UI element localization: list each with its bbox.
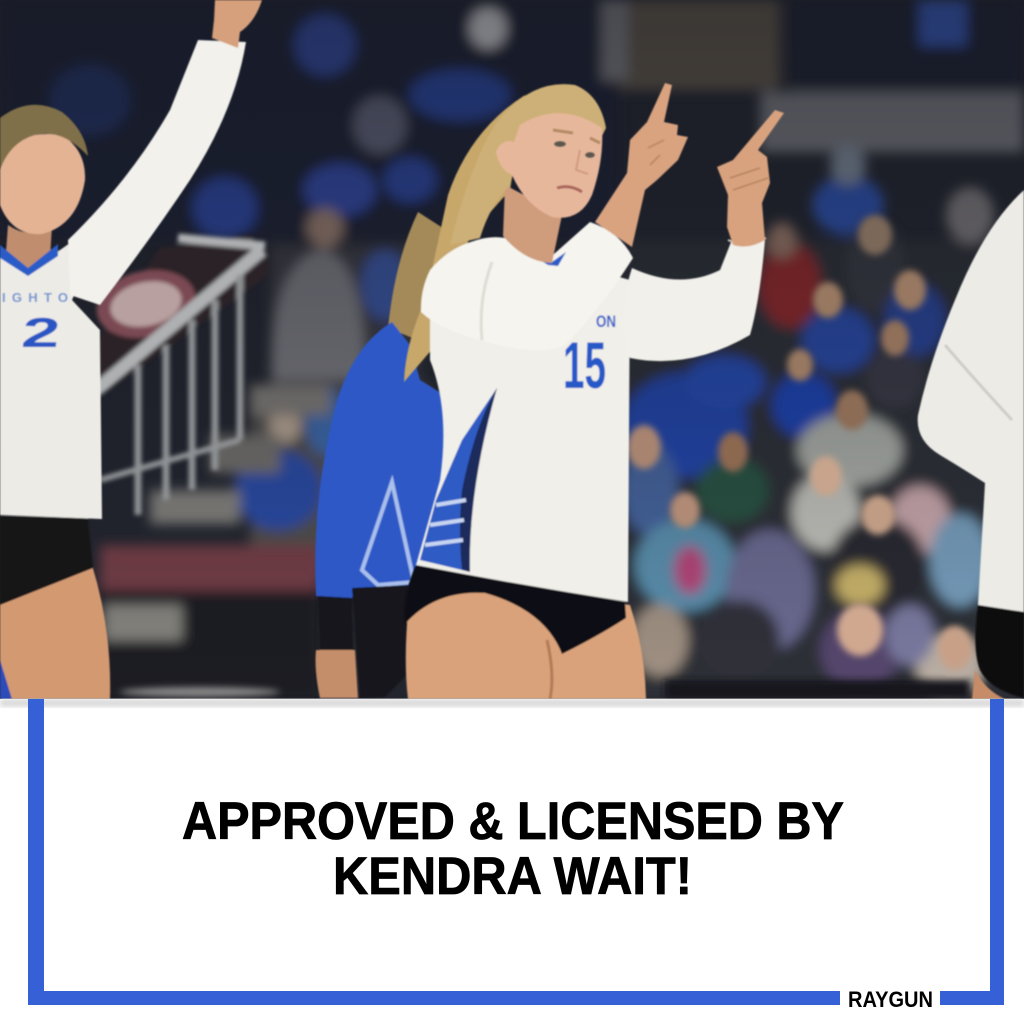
near forearm and hand [595, 83, 688, 247]
face [496, 113, 602, 218]
player number 2 at left: 2 [20, 309, 63, 356]
shorts [404, 565, 626, 654]
player number 2 at left: IGHTO [2, 290, 68, 305]
brand wordmark: RAYGUN [848, 987, 933, 1012]
photo: volleyball players in front of crowd [0, 0, 1024, 700]
jersey number and wordmark: 15 [563, 328, 606, 402]
player number 2 at left [0, 0, 262, 699]
hair back [450, 84, 606, 245]
neck [503, 185, 562, 263]
near arm sleeve [420, 221, 634, 320]
title: APPROVED & LICENSED BY [182, 792, 844, 851]
blurred crowd background [0, 0, 1024, 700]
blue frame [28, 699, 1004, 1005]
far arm sleeve [623, 232, 765, 361]
far forearm and hand [717, 110, 784, 247]
title [182, 792, 844, 906]
eyes and mouth [553, 130, 600, 143]
side panel [420, 388, 497, 570]
title: KENDRA WAIT! [333, 847, 692, 906]
teammate in blue jersey [315, 212, 452, 698]
railing and sign at left [90, 235, 268, 515]
legs [406, 575, 646, 699]
jersey body [416, 237, 630, 602]
shadow under photo [0, 699, 1024, 707]
main player number 15 [404, 83, 784, 699]
ponytail [404, 95, 525, 382]
main player number 15: ON [596, 312, 616, 331]
player at right edge [918, 190, 1024, 699]
collar [543, 252, 566, 267]
